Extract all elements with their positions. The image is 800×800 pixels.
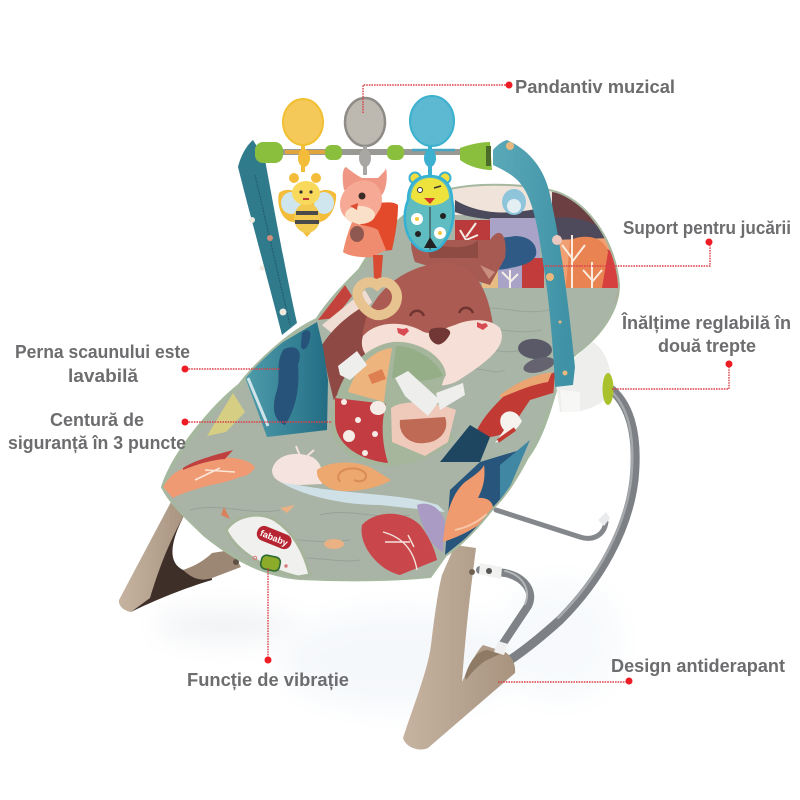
pendant: grey: [345, 98, 385, 175]
callout: Înălțime reglabilă în două trepte: două trepte: [658, 336, 756, 356]
yellow patch: [207, 393, 245, 436]
pendant: blue: [410, 96, 454, 175]
callout: Înălțime reglabilă în două trepte: Înălțime reglabilă în: [621, 312, 791, 333]
owl print: [502, 189, 526, 215]
callout: Centură de siguranță în 3 puncte: Centură de: [50, 410, 144, 430]
seat harness: [330, 342, 465, 466]
callout: Design antiderapant: [498, 656, 785, 684]
back print: top: [440, 185, 620, 305]
callout: Funcție de vibrație: [187, 568, 349, 690]
callout: Suport pentru jucării: [545, 218, 791, 266]
callout: Funcție de vibrație: Funcție de vibrație: [187, 670, 349, 690]
seat grey: [160, 436, 480, 582]
toy: ladybug: [405, 172, 454, 251]
left toy arch tube: [238, 140, 297, 335]
toy: teether: [357, 282, 397, 315]
rocker frame: [480, 390, 635, 660]
callout: Perna scaunului este lavabilă: Perna scaunului este: [15, 342, 190, 362]
callout: Centură de siguranță în 3 puncte: siguranță în 3 puncte: [8, 433, 186, 453]
floor shadow: [155, 580, 620, 710]
toy: squirrel: [340, 167, 398, 280]
squirrel body: [322, 309, 367, 400]
back print: blue cloud: [498, 236, 536, 270]
right orange leaf: [443, 465, 493, 542]
callout: Înălțime reglabilă în două trepte: [612, 312, 791, 389]
vibration control panel: [226, 515, 310, 577]
right flank dark print: [445, 450, 520, 555]
bottom orange spots: [221, 505, 344, 549]
right side hinge: [556, 342, 614, 412]
right toy arch tube: [493, 140, 575, 387]
squirrel ears: [411, 233, 506, 285]
squirrel face: [362, 320, 502, 386]
pendant: yellow: [283, 99, 323, 172]
callout: Suport pentru jucării: Suport pentru jucării: [623, 218, 791, 238]
callout: Perna scaunului este lavabilă: [15, 342, 280, 386]
snail: [272, 446, 445, 512]
back print: quilted grey: [482, 288, 618, 352]
right red and purple leaves: [361, 504, 445, 575]
right leg: [403, 545, 515, 750]
back print: left top: [313, 282, 350, 324]
callout: Design antiderapant: Design antiderapant: [611, 656, 785, 676]
left orange leaf: [163, 457, 255, 498]
callout: Pandantiv muzical: [363, 77, 675, 113]
back print: lower right: [440, 380, 550, 470]
left leg: [119, 500, 241, 612]
toy: bee: [278, 173, 336, 237]
seat fabric: [160, 185, 620, 582]
brand logo: fababy: [259, 528, 289, 548]
callout: Centură de siguranță în 3 puncte: [8, 410, 332, 453]
toy bar: [255, 142, 492, 170]
callout: Pandantiv muzical: Pandantiv muzical: [515, 77, 675, 97]
squirrel head: [362, 266, 493, 340]
left blue wing: [245, 322, 328, 437]
callout: Perna scaunului este lavabilă: lavabilă: [68, 366, 139, 386]
